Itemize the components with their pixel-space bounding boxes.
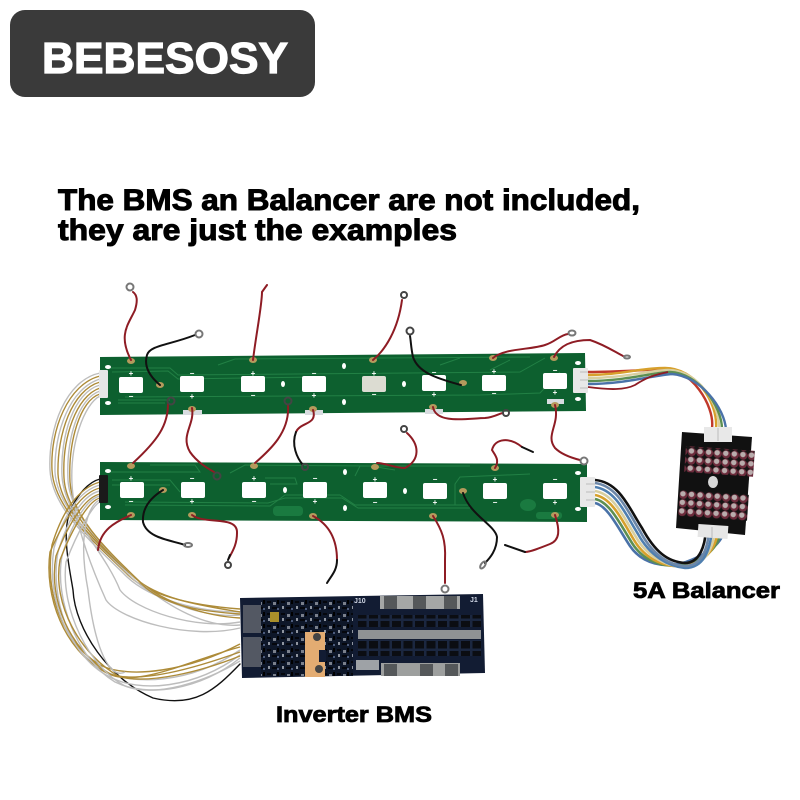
polarity marks: − [493, 498, 498, 507]
heading note: The BMS an Balancer are not included, [58, 184, 640, 217]
heading note: they are just the examples [58, 214, 457, 247]
polarity marks: + [433, 498, 438, 507]
polarity marks: + [493, 475, 498, 484]
upper terminals [380, 596, 460, 609]
balance connectors [243, 605, 261, 667]
polarity marks: + [373, 475, 378, 484]
polarity marks: − [372, 390, 377, 399]
brand badge [10, 10, 315, 97]
balancer connectors [698, 427, 732, 539]
polarity marks: − [312, 369, 317, 378]
polarity marks: − [190, 474, 195, 483]
polarity marks: + [492, 367, 497, 376]
top balance PCB [100, 353, 586, 415]
polarity marks: − [553, 475, 558, 484]
copper shunt [305, 632, 326, 677]
polarity marks: + [553, 498, 558, 507]
heading note [58, 184, 640, 247]
bottom balance PCB [100, 462, 587, 522]
polarity marks: + [313, 497, 318, 506]
centre label [708, 476, 718, 488]
polarity marks [129, 366, 558, 401]
control electronics [261, 600, 353, 676]
polarity marks: − [190, 369, 195, 378]
polarity marks: + [129, 369, 134, 378]
polarity marks: − [252, 497, 257, 506]
terminal markings: J1 [470, 597, 478, 604]
polarity marks: + [190, 392, 195, 401]
left wire harness [49, 373, 240, 701]
polarity marks: − [251, 391, 256, 400]
solder pads [127, 355, 559, 412]
polarity marks: + [129, 474, 134, 483]
polarity marks: − [433, 475, 438, 484]
BMS label: Inverter BMS [276, 702, 432, 727]
brand name: BEBESOSY [42, 34, 288, 83]
yellow chip [270, 612, 279, 622]
polarity marks: + [252, 474, 257, 483]
sense wires with ring terminals [98, 284, 630, 592]
traces [110, 357, 560, 403]
inverter BMS board [240, 594, 485, 678]
right rainbow cable, bottom PCB to balancer [595, 480, 724, 568]
upper capacitor bank [684, 446, 755, 477]
balancer label: 5A Balancer [633, 578, 780, 603]
polarity marks: + [251, 369, 256, 378]
polarity marks: + [312, 391, 317, 400]
polarity marks: + [190, 497, 195, 506]
solder pads [127, 463, 559, 519]
polarity marks: − [129, 392, 134, 401]
polarity marks: − [373, 498, 378, 507]
polarity marks: − [313, 474, 318, 483]
lower terminals [356, 660, 460, 676]
polarity marks: − [129, 497, 134, 506]
traces [105, 465, 562, 519]
right rainbow cable, top PCB to balancer [588, 368, 726, 430]
polarity marks: + [553, 388, 558, 397]
lower capacitor bank [678, 490, 749, 521]
battery windows [105, 469, 581, 511]
polarity marks: − [432, 368, 437, 377]
polarity marks [129, 474, 558, 507]
5A balancer board [676, 427, 755, 539]
PCB connectors [99, 368, 595, 507]
polarity marks: + [432, 390, 437, 399]
polarity marks: − [492, 389, 497, 398]
terminal markings [354, 597, 478, 605]
MOSFET rows [358, 615, 481, 656]
terminal markings: J10 [354, 598, 366, 605]
polarity marks: − [553, 366, 558, 375]
polarity marks: + [372, 369, 377, 378]
battery windows [105, 361, 581, 415]
